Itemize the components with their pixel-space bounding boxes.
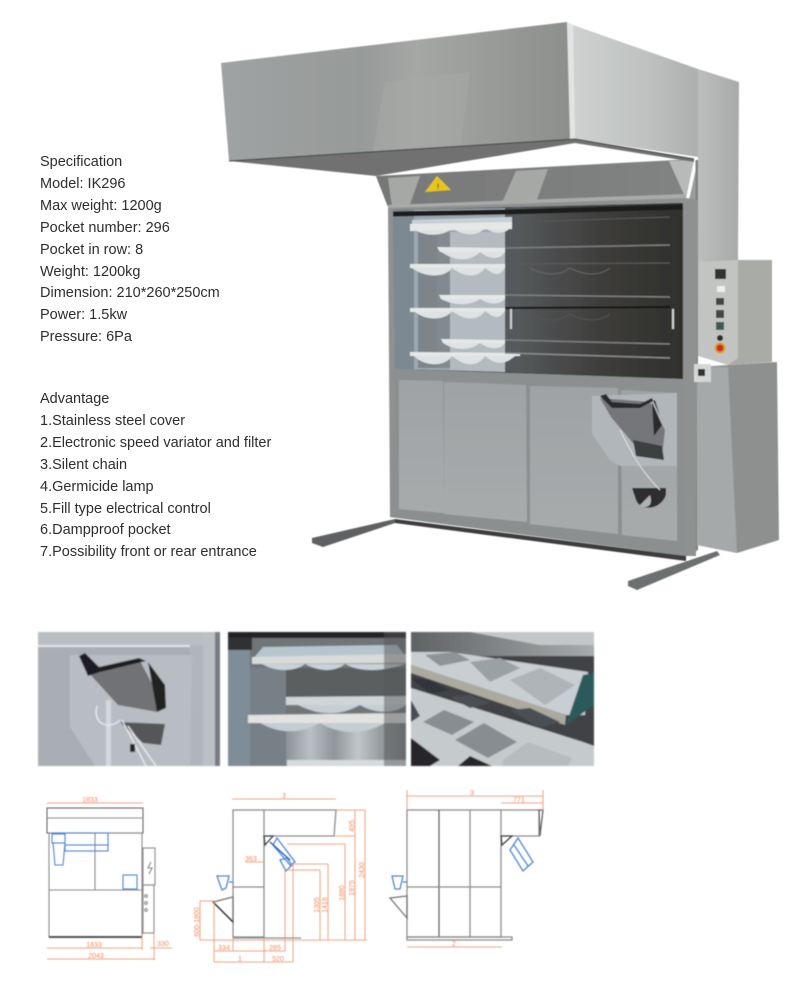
drawing: side elevation: 334 (218, 945, 230, 952)
loader chute opening (592, 393, 677, 508)
lower right cabinet (697, 362, 779, 553)
drawing: front elevation: 2043 (88, 953, 104, 960)
drawing: rear elevation: 3 (470, 790, 474, 797)
photo: tray rack detail (228, 632, 406, 766)
text block: specification: Max weight: 1200g (40, 198, 162, 214)
text block: advantage (40, 391, 272, 560)
side column (689, 69, 739, 556)
text block: specification: Pocket in row: 8 (40, 242, 143, 258)
drawing: side elevation: 2430 (359, 862, 366, 878)
drawing: side elevation (194, 793, 367, 963)
drawing: side elevation: 520 (272, 956, 284, 963)
drawing: front elevation: 1833 (82, 797, 98, 804)
funnel frame under hood: ! (437, 182, 439, 192)
text block: advantage: Advantage (40, 391, 109, 407)
text block: specification: Model: IK296 (40, 176, 125, 192)
text block: specification: Power: 1.5kw (40, 307, 127, 323)
text block: specification: Dimension: 210*260*250cm (40, 285, 220, 301)
hood (221, 22, 698, 176)
text block: advantage: 7.Possibility front or rear entrance (40, 544, 257, 560)
text block: advantage: 6.Dampproof pocket (40, 522, 171, 538)
text block: specification (40, 154, 220, 345)
drawing: front elevation: 1833 (86, 942, 102, 949)
text block: specification: Pressure: 6Pa (40, 329, 132, 345)
drawing: side elevation: 600-1800 (194, 907, 201, 937)
funnel frame under hood (376, 159, 694, 210)
drawing: side elevation: 1975 (349, 880, 356, 896)
drawing: side elevation: 1880 (339, 885, 346, 901)
text block: advantage: 5.Fill type electrical control (40, 501, 211, 517)
drawing: side elevation: 495 (349, 820, 356, 832)
drawing: side elevation: 1 (238, 956, 242, 963)
trays (412, 217, 515, 364)
text block: specification: Weight: 1200kg (40, 264, 140, 280)
text block: advantage: 3.Silent chain (40, 457, 127, 473)
drawing: rear elevation: 2 (452, 941, 456, 948)
drawing: side elevation: 3 (282, 793, 286, 800)
text block: advantage: 2.Electronic speed variator and filter (40, 435, 271, 451)
text block: advantage: 1.Stainless steel cover (40, 413, 185, 429)
base legs (312, 519, 720, 590)
drawing: side elevation: 363 (245, 856, 257, 863)
drawing: front elevation: 330 (157, 941, 169, 948)
drawing: rear elevation: 771 (513, 797, 525, 804)
drawing: side elevation: 1416 (322, 897, 329, 913)
main photo: stainless steel machine (221, 22, 779, 590)
front frame (388, 198, 698, 556)
text block: specification: Pocket number: 296 (40, 220, 170, 236)
control box with buttons (694, 260, 772, 382)
text block: specification: Specification (40, 154, 122, 170)
drawing: side elevation: 1305 (314, 897, 321, 913)
lower door panels (390, 369, 686, 556)
drawing: front elevation (47, 797, 172, 960)
photo: chute detail (38, 632, 220, 766)
photo: pocket close-up (411, 632, 594, 766)
drawing: side elevation: 285 (269, 945, 281, 952)
drawing: rear elevation (390, 790, 543, 948)
text block: advantage: 4.Germicide lamp (40, 479, 154, 495)
window with trays (393, 203, 683, 379)
